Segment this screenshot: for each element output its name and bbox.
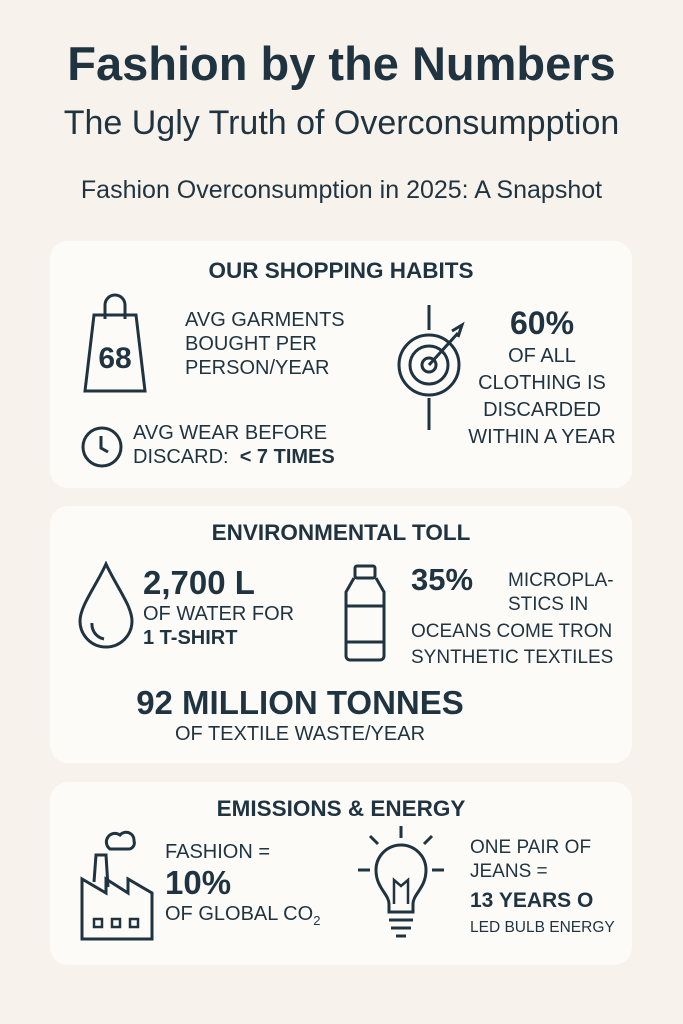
stat: 60% (468, 305, 616, 448)
stat: jeans = 13 years LED (470, 837, 615, 936)
heading: ENVIRONMENTAL TOLL (212, 520, 470, 545)
text: avg garments: BOUGHT PER (185, 333, 317, 355)
stat: 10% CO2: FASHION = (165, 841, 270, 863)
stat: 35% microplastics: MICROPLA- (508, 570, 614, 591)
stat: 2,700 L: OF WATER FOR (143, 603, 294, 625)
icon: water drop (78, 561, 134, 648)
stat: 60%: OF ALL (508, 345, 576, 367)
panel: emissions & energy (50, 782, 632, 965)
icon: shopping bag with 68: 68 (98, 342, 132, 375)
text: avg garments (185, 309, 345, 379)
stat: jeans = 13 years LED: JEANS = (470, 861, 548, 882)
snapshot line: Fashion Overconsumption in 2025: A Snapshot (81, 176, 602, 204)
icon: target (398, 305, 465, 430)
stat: 60%: CLOTHING IS (478, 372, 606, 394)
stat: 10% CO2: OF GLOBAL CO2 (165, 903, 320, 928)
text: avg wear (133, 422, 335, 468)
icon: clock (82, 426, 122, 468)
stat: 10% CO2: 10% (165, 864, 231, 901)
stat: jeans = 13 years LED: 13 YEARS O (470, 889, 593, 912)
stat: 92 million tonnes (136, 684, 464, 745)
stat: 35% microplastics: STICS IN (508, 594, 588, 615)
text: avg wear: DISCARD: < 7 TIMES (133, 446, 335, 468)
heading: OUR SHOPPING HABITS (208, 258, 474, 283)
text: avg garments: PERSON/YEAR (185, 357, 329, 379)
stat: 92 million tonnes: OF TEXTILE WASTE/YEAR (175, 723, 425, 745)
heading: EMISSIONS & ENERGY (217, 796, 465, 821)
icon: light bulb (358, 826, 444, 938)
stat: jeans = 13 years LED: LED BULB ENERGY (470, 919, 615, 936)
stat: 2,700 L: 2,700 L (143, 564, 255, 601)
stat: 10% CO2 (165, 841, 320, 928)
stat: 35% microplastics: OCEANS COME TRON (411, 621, 612, 642)
icon: factory (80, 830, 154, 940)
panel: environmental toll (50, 506, 632, 763)
stat: jeans = 13 years LED: ONE PAIR OF (470, 837, 591, 858)
text: avg wear: AVG WEAR BEFORE (133, 422, 327, 444)
stat: 35% microplastics (411, 562, 614, 668)
stat: 2,700 L: 1 T-SHIRT (143, 627, 237, 649)
stat: 60%: WITHIN A YEAR (468, 426, 616, 448)
icon: bottle (344, 564, 386, 662)
text: avg garments: AVG GARMENTS (185, 309, 345, 331)
stat: 60%: 60% (510, 305, 574, 341)
stat: 35% microplastics: 35% (411, 562, 473, 597)
stat: 92 million tonnes: 92 MILLION TONNES (136, 684, 464, 721)
panel: shopping habits (50, 241, 632, 488)
subtitle: The Ugly Truth of Overconsumpption (64, 104, 619, 142)
stat: 35% microplastics: SYNTHETIC TEXTILES (411, 647, 613, 668)
title: Fashion by the Numbers (67, 37, 616, 90)
icon: shopping bag with 68 (83, 294, 147, 392)
stat: 2,700 L (143, 564, 294, 649)
stat: 60%: DISCARDED (483, 399, 601, 421)
